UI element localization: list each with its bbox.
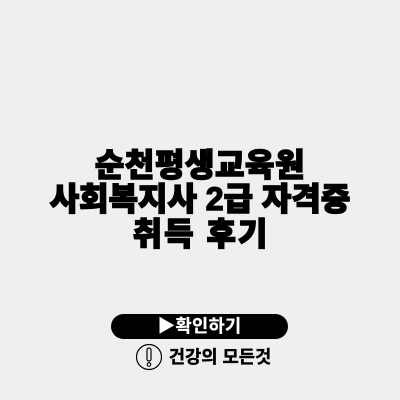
title (49, 147, 350, 252)
button: confirm (111, 314, 288, 339)
title: 사회복지사 2급 자격증 (50, 181, 350, 217)
title: 취득 후기 (133, 216, 269, 252)
icon: exclamation circle (136, 344, 162, 370)
title: 순천평생교육원 (95, 147, 305, 183)
brand text: 건강의 모든것 (169, 347, 271, 367)
button: confirm: ▶확인하기 (158, 316, 241, 336)
